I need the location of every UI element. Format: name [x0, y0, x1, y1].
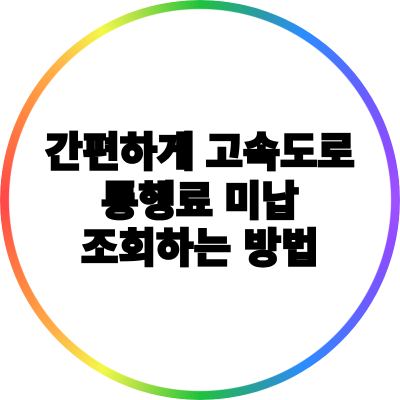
title: 간편하게 고속도로	[45, 129, 355, 175]
title	[44, 129, 355, 271]
title: 조회하는 방법	[81, 225, 319, 271]
title: 통행료 미납	[101, 178, 299, 224]
